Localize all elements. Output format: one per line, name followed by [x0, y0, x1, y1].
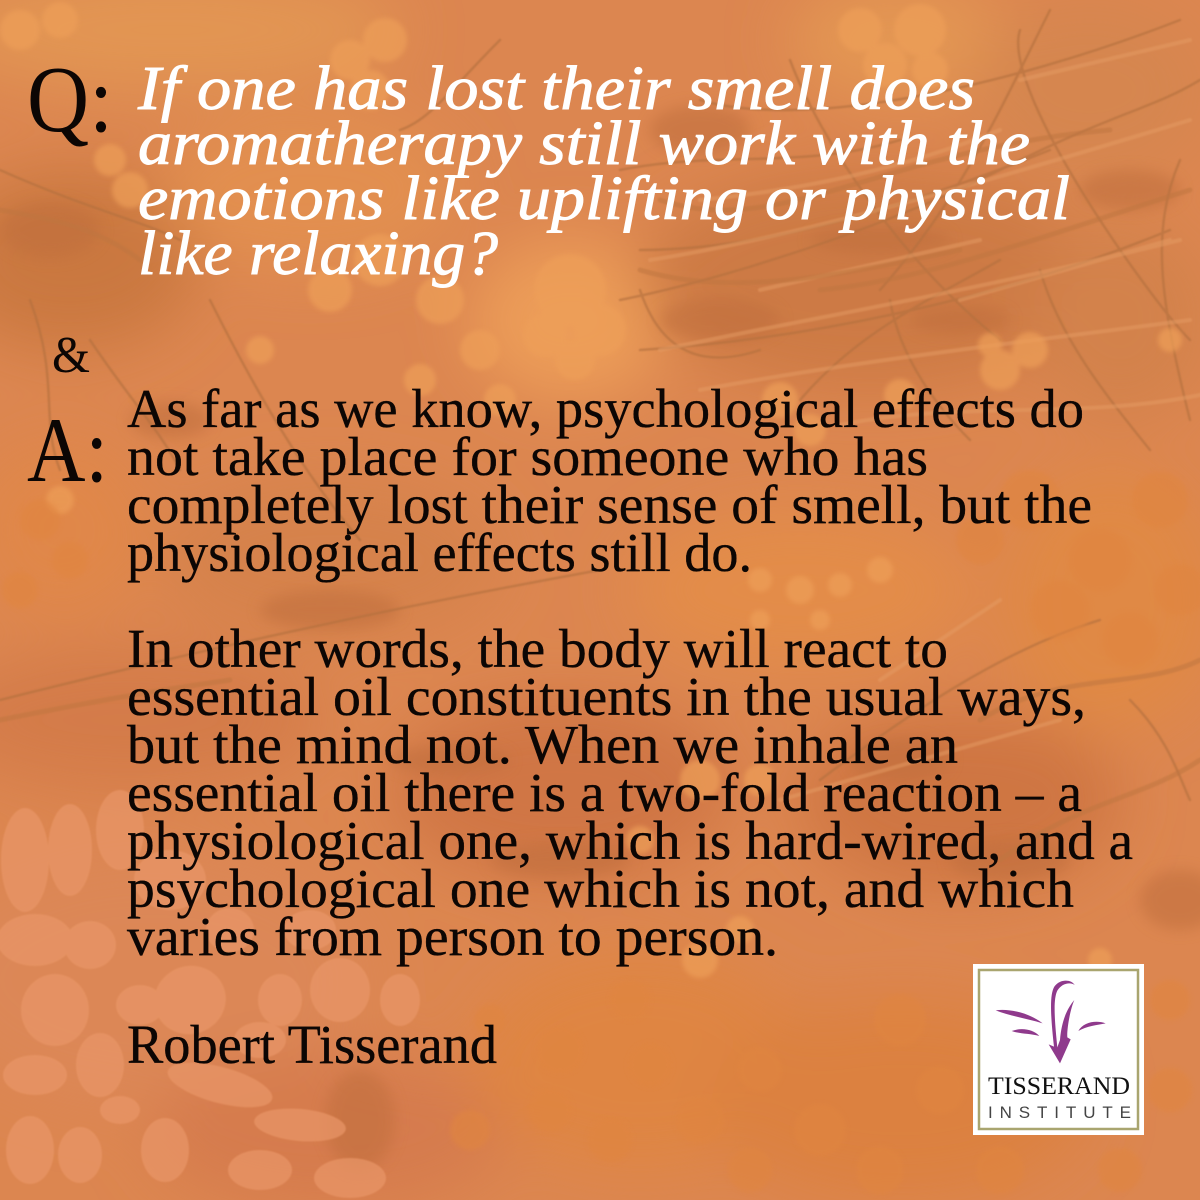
answer first paragraph: physiological effects still do.: [127, 522, 752, 583]
stems top right: [0, 10, 1200, 860]
question text: emotions like uplifting or physical: [138, 165, 1070, 233]
ampersand: &: [52, 327, 90, 384]
answer second paragraph: physiological one, which is hard-wired, and a: [127, 810, 1133, 871]
stones bottom left: [0, 790, 420, 1198]
answer second paragraph: but the mind not. When we inhale an: [127, 714, 958, 775]
answer second paragraph: psychological one which is not, and which: [127, 858, 1074, 919]
attribution: Robert Tisserand: [127, 1014, 497, 1075]
answer second paragraph: varies from person to person.: [127, 906, 778, 967]
question label: Q:: [27, 48, 113, 152]
answer first paragraph: As far as we know, psychological effects do: [127, 378, 1084, 439]
answer first paragraph: [127, 378, 1092, 583]
icon: purple flower: [996, 981, 1106, 1063]
answer first paragraph: completely lost their sense of smell, but the: [127, 474, 1092, 535]
question text: If one has lost their smell does: [137, 55, 975, 123]
answer second paragraph: [127, 618, 1133, 967]
logo wordmark: TISSERAND: [988, 1073, 1130, 1100]
logo wordmark: INSTITUTE: [988, 1103, 1131, 1122]
logo: Tisserand Institute: [973, 964, 1144, 1135]
answer second paragraph: essential oil constituents in the usual ways,: [127, 666, 1086, 727]
answer second paragraph: In other words, the body will react to: [127, 618, 948, 679]
logo wordmark: [988, 1073, 1131, 1122]
question text: [137, 55, 1070, 288]
answer second paragraph: essential oil there is a two-fold reaction – a: [127, 762, 1082, 823]
answer label: A:: [27, 399, 108, 501]
answer first paragraph: not take place for someone who has: [127, 426, 928, 487]
question text: like relaxing?: [138, 220, 498, 288]
question text: aromatherapy still work with the: [138, 110, 1030, 178]
